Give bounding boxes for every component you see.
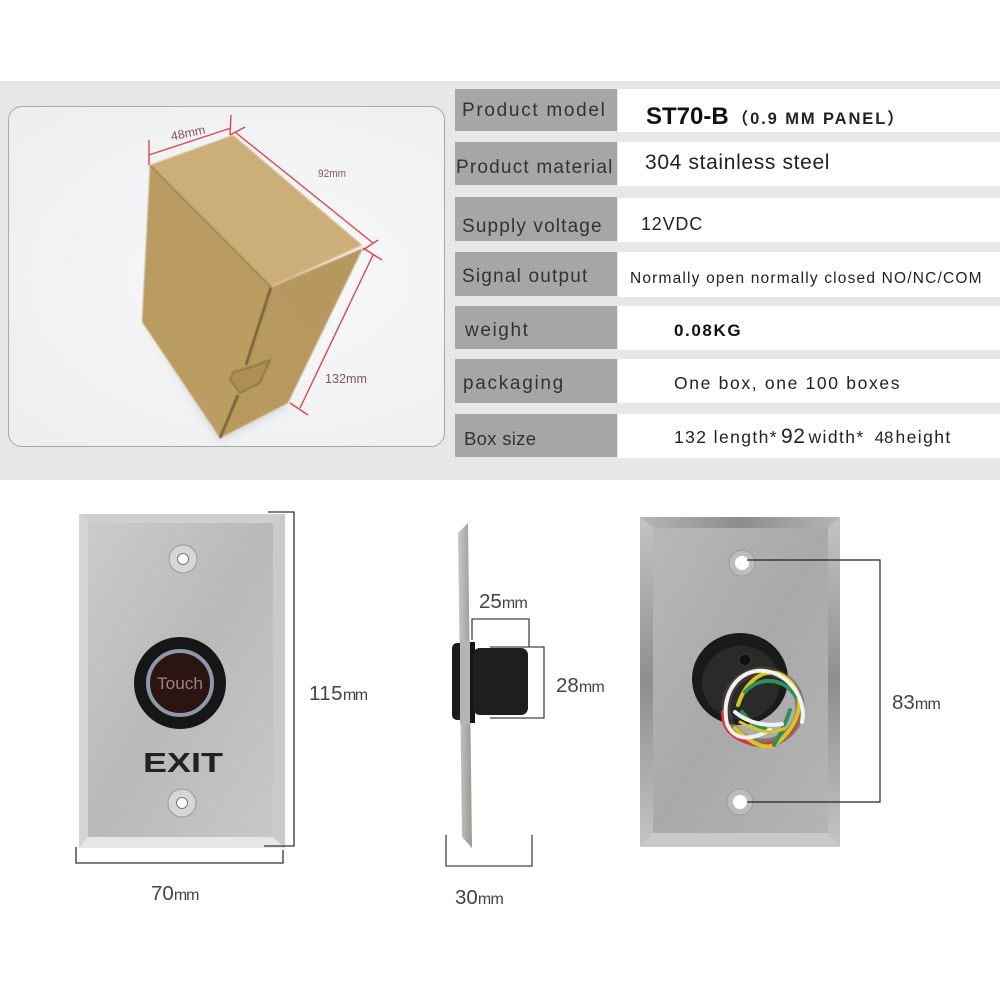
spec label: model — [455, 89, 617, 131]
dimension 115mm: 115mm — [309, 682, 368, 705]
dimension 30mm: 30mm — [455, 886, 503, 909]
switch mount — [692, 633, 788, 725]
spec label: box size — [455, 414, 617, 457]
switch body — [452, 640, 528, 724]
spec value: voltage: 12VDC — [641, 214, 703, 234]
spec label: packaging: packaging — [463, 373, 565, 394]
panel: box photo — [8, 106, 445, 447]
spec value: packaging — [618, 359, 1000, 403]
icon: cardboard box with dimensions: 48mm — [169, 123, 207, 143]
icon: cardboard box with dimensions: 132mm — [325, 372, 367, 386]
spec value: signal — [618, 252, 1000, 297]
spec value: box size — [618, 414, 1000, 458]
dimension 70mm: 70mm — [151, 882, 199, 905]
spec value: model — [618, 89, 1000, 132]
spec value: model: ST70-B（0.9 MM PANEL） — [646, 103, 906, 130]
rear hole top — [729, 550, 755, 576]
brackets — [76, 512, 294, 863]
spec label: material: Product material — [456, 157, 614, 178]
spec band background — [0, 81, 1000, 480]
spec label: voltage: Supply voltage — [462, 216, 603, 237]
spec value: material: 304 stainless steel — [645, 151, 830, 174]
side view — [446, 523, 604, 909]
spec label: voltage — [455, 197, 617, 241]
dimension 28mm: 28mm — [556, 674, 604, 697]
spec value: signal: Normally open normally closed NO/NC/COM — [630, 270, 983, 287]
exit label: EXIT — [143, 747, 223, 778]
rear hole bottom — [727, 789, 753, 815]
spec value: packaging: One box, one 100 boxes — [674, 373, 901, 393]
screw hole bottom — [168, 789, 196, 817]
spec label: signal — [455, 252, 617, 296]
spec label: signal: Signal output — [462, 266, 589, 287]
spec value: weight: 0.08KG — [674, 321, 742, 340]
touch button — [134, 637, 226, 729]
front plate — [76, 512, 368, 905]
spec label: weight: weight — [465, 320, 530, 341]
screw hole top — [169, 545, 197, 573]
icon: cardboard box with dimensions: 92mm — [318, 168, 346, 180]
rear plate — [640, 517, 940, 847]
spec label: model: Product model — [462, 100, 607, 121]
spec label: weight — [455, 306, 617, 349]
spec label: material — [455, 142, 617, 185]
spec value: voltage — [618, 198, 1000, 242]
dimension 83mm: 83mm — [892, 691, 940, 714]
spec value: material — [618, 142, 1000, 186]
dimension 25mm: 25mm — [479, 590, 527, 613]
spec label: packaging — [455, 359, 617, 403]
spec label: box size: Box size — [464, 428, 536, 449]
wire bundle — [723, 671, 803, 747]
spec value: box size: 132 length*92width* 48height — [674, 425, 952, 448]
touch button: Touch — [157, 674, 203, 693]
spec value: weight — [618, 306, 1000, 350]
